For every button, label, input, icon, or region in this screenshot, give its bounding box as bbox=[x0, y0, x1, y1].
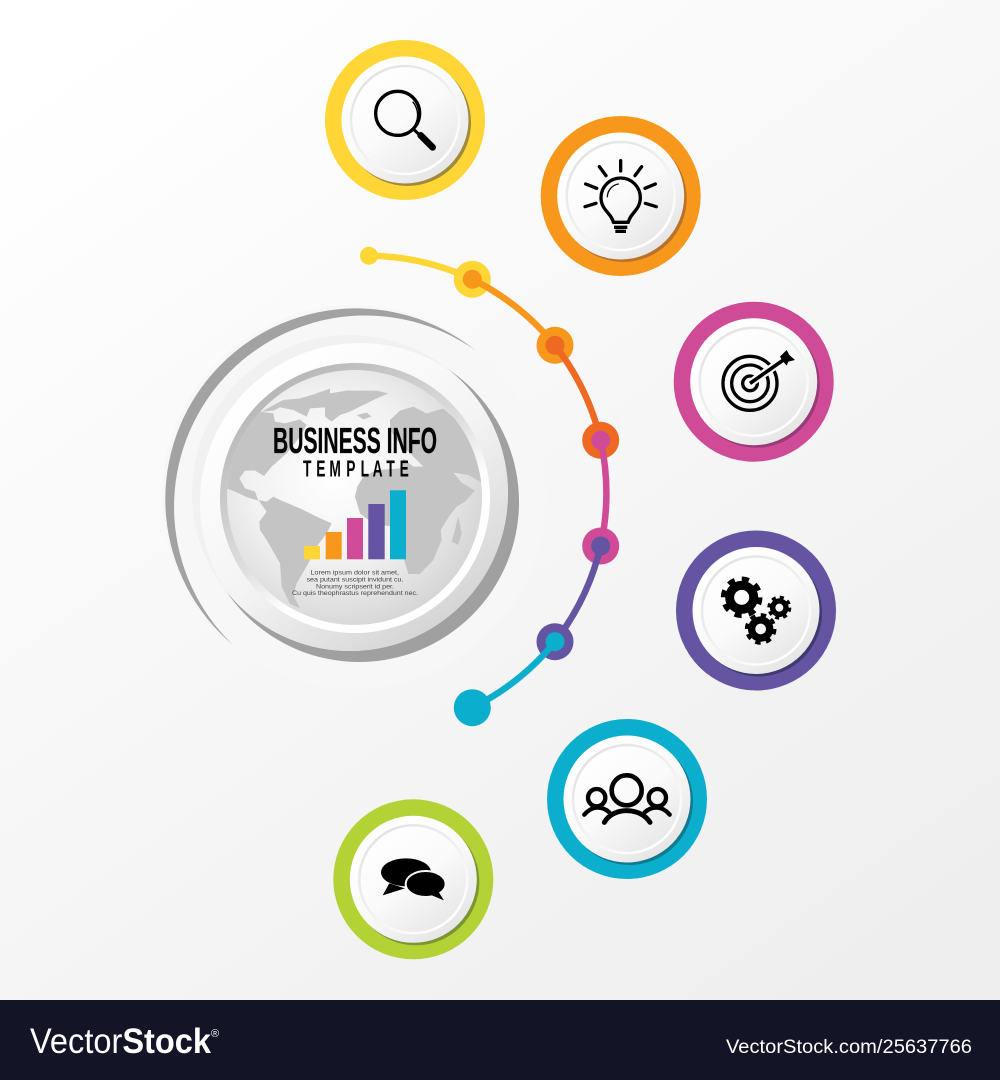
halo disc bbox=[162, 305, 546, 689]
icon: light bulb bbox=[585, 161, 656, 231]
segment: cyan bbox=[472, 642, 555, 708]
timeline arc bbox=[360, 247, 619, 726]
lower-right grey crescent bbox=[199, 342, 519, 662]
inner rim bbox=[220, 363, 490, 633]
dot: cyan bbox=[546, 632, 564, 651]
dot: pink bbox=[591, 431, 610, 450]
lorem ipsum text block: Cu quis theophrastus reprehendunt nec. bbox=[292, 590, 418, 597]
main pale disc bbox=[192, 335, 508, 651]
node: red-orange bbox=[582, 422, 619, 459]
bar chart bbox=[304, 490, 406, 559]
lorem ipsum text block bbox=[292, 570, 418, 597]
icon: magnifying glass bbox=[376, 91, 433, 147]
node: yellow bbox=[454, 261, 491, 298]
registered mark: ® bbox=[211, 1028, 219, 1040]
node: orange bbox=[536, 327, 574, 364]
icon: gears bbox=[724, 579, 790, 643]
badge: cyan team bbox=[547, 719, 707, 879]
segment: orange bbox=[472, 279, 555, 345]
segment: red-orange bbox=[555, 345, 601, 440]
badge: green chat bbox=[333, 799, 493, 959]
title: business info: BUSINESS INFO bbox=[273, 420, 437, 461]
badge: orange idea bbox=[541, 116, 701, 276]
icon: target with arrow bbox=[723, 350, 795, 410]
footer logo: VectorStock bbox=[30, 1022, 211, 1061]
lorem ipsum text block: sea putant suscipit invidunt cu. bbox=[306, 576, 404, 584]
main light disc bbox=[200, 343, 520, 663]
world map bbox=[217, 389, 483, 608]
central globe panel bbox=[165, 308, 519, 662]
dot: orange bbox=[463, 270, 482, 289]
dot: red-orange bbox=[546, 336, 564, 355]
segment: yellow bbox=[369, 256, 472, 279]
footer id: VectorStock.com/25637766 bbox=[726, 1037, 972, 1058]
badge: yellow search bbox=[325, 40, 485, 200]
subtitle: template: TEMPLATE bbox=[303, 457, 409, 483]
icon: people bbox=[584, 775, 670, 822]
footer bar bbox=[0, 1000, 1000, 1080]
end node: cyan bbox=[454, 689, 491, 726]
badge: pink target bbox=[674, 302, 834, 462]
icon: speech bubbles bbox=[381, 858, 446, 900]
globe disc bbox=[227, 370, 482, 625]
lorem ipsum text block: Lorem ipsum dolor sit amet, bbox=[310, 570, 399, 576]
badge: purple settings bbox=[676, 530, 836, 690]
segment: pink bbox=[601, 440, 606, 546]
dot: purple bbox=[591, 536, 610, 556]
lorem ipsum text block: Nonumy scripserit id per. bbox=[316, 583, 394, 590]
segment: purple bbox=[555, 546, 601, 642]
start dot: yellow bbox=[360, 247, 378, 265]
node: pink bbox=[582, 528, 619, 564]
node: purple bbox=[536, 623, 574, 660]
outer grey crescent bbox=[165, 308, 475, 645]
